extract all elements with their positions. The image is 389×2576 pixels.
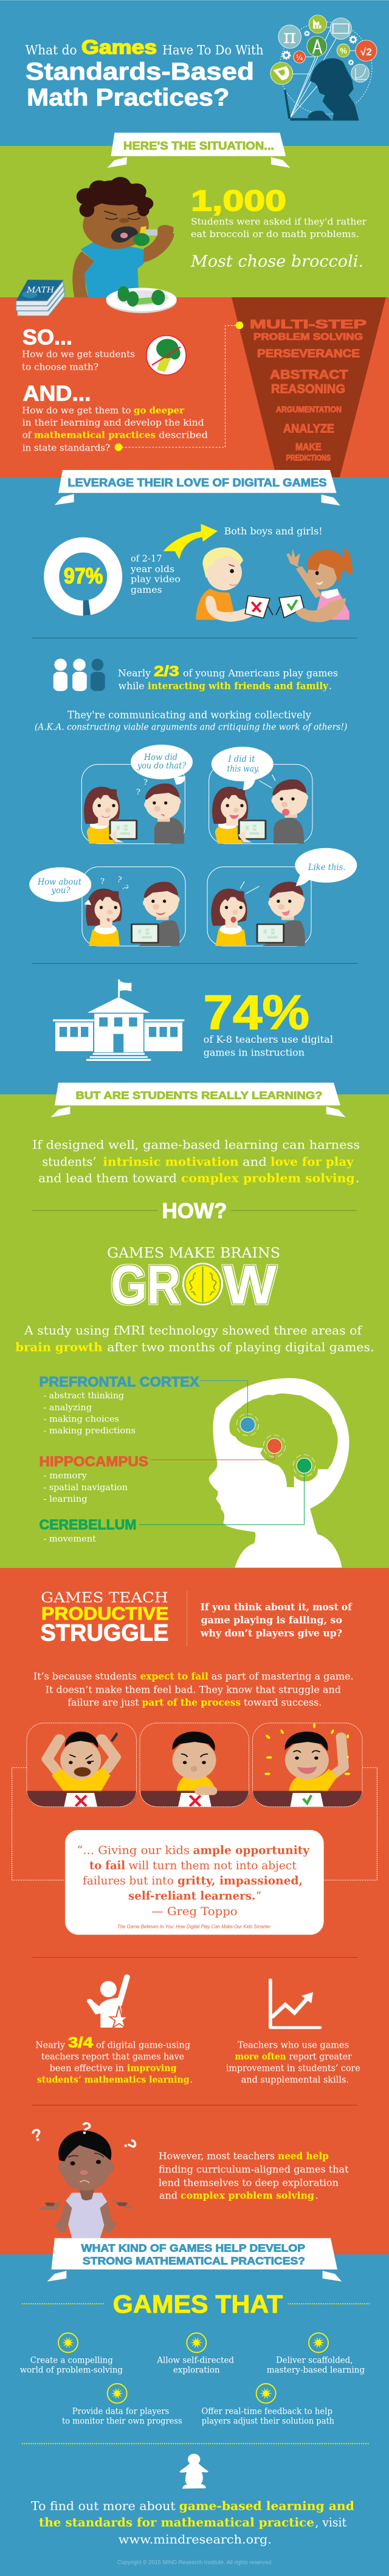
text: teachers who use games more often: and supplemental skills.	[241, 2074, 349, 2085]
label: hippocampus: - learning	[43, 1494, 88, 1504]
text block: so how do we get students to choose math: to choose math?	[22, 361, 98, 372]
illustration: confused teacher: ?	[29, 2125, 44, 2146]
text: communicating and working collectively	[35, 710, 347, 733]
banner: but are students really learning	[51, 1083, 346, 1117]
text: nearly 3/4 of teachers: students’ mathematics learning	[37, 2074, 190, 2085]
callout: Greg Toppo quote: ample opportunity	[193, 1843, 310, 1857]
text: if designed well	[32, 1138, 360, 1185]
icon: school building	[53, 979, 184, 1061]
text block: and how do we get them to go deeper: described	[159, 429, 208, 440]
text block: and how do we get them to go deeper: mathematical practices	[34, 429, 156, 440]
comic panel 1: you do that?	[137, 761, 187, 771]
label: cerebellum: - movement	[43, 1535, 96, 1544]
text: nearly 3/4 of teachers: Nearly	[35, 2039, 65, 2050]
text: teachers need help: lend themselves to deep exploration	[159, 2177, 339, 2188]
icon: student thinking with math symbols: %	[340, 46, 347, 55]
comic panel 1: ?	[136, 788, 140, 797]
feature: self-directed exploration: Allow self-directed	[156, 2356, 234, 2366]
text: if designed well: If designed well, game-based learning can harness	[32, 1138, 360, 1152]
text: nearly 3/4 of teachers: improving	[127, 2063, 177, 2074]
funnel of mathematical practices: PROBLEM SOLVING	[253, 332, 363, 342]
stat: 74 percent of teachers: of K-8 teachers use digital	[204, 1034, 333, 1045]
illustration: broccoli plate	[106, 286, 177, 313]
label: cerebellum	[39, 1517, 137, 1544]
text: if designed well: .	[356, 1171, 359, 1185]
text: nearly 2/3 of young Americans: .	[329, 680, 332, 691]
dotted connector	[115, 322, 243, 451]
callout: Greg Toppo quote: — Greg Toppo	[151, 1905, 238, 1918]
funnel of mathematical practices: ABSTRACT	[270, 368, 348, 382]
text: communicating and working collectively: They're communicating and working collectively	[67, 710, 311, 722]
comic panel 3	[29, 867, 185, 946]
text: of 2-17 year olds play video games: year olds	[130, 564, 174, 575]
callout: Greg Toppo quote: The Game Believes In You: How Digital Play Can Make Our Kids Smarter	[117, 1924, 271, 1930]
comic panel 2: this way.	[227, 764, 260, 774]
callout: Greg Toppo quote: “... Giving our kids	[77, 1843, 190, 1857]
text block: and how do we get them to go deeper: AND...	[23, 382, 91, 406]
text: of 2-17 year olds play video games	[130, 553, 181, 595]
feature: data for players: to monitor their own progress	[62, 2417, 182, 2426]
label: prefrontal cortex	[39, 1374, 199, 1435]
text: nearly 2/3 of young Americans: Nearly	[118, 668, 151, 679]
text: teachers who use games more often: improvement in students’ core	[226, 2063, 360, 2074]
label: prefrontal cortex: - analyzing	[43, 1403, 92, 1412]
comic panel 1	[81, 745, 193, 844]
callout: Greg Toppo quote: gritty, impassioned,	[177, 1874, 303, 1887]
banner: what kind of games: WHAT KIND OF GAMES HELP DEVELOP	[81, 2242, 305, 2254]
text: teachers who use games more often: more often	[235, 2051, 286, 2062]
text: students expect to fail: part of the process	[142, 1697, 241, 1708]
text: students expect to fail: expect to fail	[140, 1670, 208, 1682]
dotted divider	[22, 2443, 370, 2444]
text block: so how do we get students to choose math	[22, 326, 135, 372]
callout: Greg Toppo quote	[65, 1830, 324, 1935]
text: students expect to fail: It doesn’t make them feel bad. They know that struggle and	[46, 1683, 341, 1695]
heading: games make brains grow: GAMES MAKE BRAINS	[107, 1245, 280, 1261]
text: of 2-17 year olds play video games: games	[131, 584, 162, 595]
comic panel 4: Like this.	[308, 863, 346, 872]
text: nearly 2/3 of young Americans: 2/3	[154, 663, 179, 680]
heading: how: HOW?	[162, 1199, 227, 1223]
title: Have To Do With	[162, 43, 264, 57]
icon: person with star	[87, 1977, 128, 2028]
arrow: yellow curved arrow	[164, 524, 218, 559]
banner: here's the situation	[107, 133, 291, 168]
icon: rising line graph	[270, 1980, 320, 2028]
feature: scaffolded learning: mastery-based learning	[267, 2366, 365, 2375]
label: hippocampus: - spatial navigation	[43, 1483, 128, 1493]
copyright: Copyright © 2015 MIND Research Institute. All rights reserved.	[117, 2559, 273, 2565]
illustration: confused teacher: ?	[78, 2118, 94, 2139]
callout: Greg Toppo quote: will turn them not into abject	[128, 1859, 297, 1872]
comic panel 3: How about	[37, 877, 82, 887]
label: hippocampus: - memory	[43, 1471, 87, 1481]
heading: games teach productive struggle: STRUGGLE	[40, 1620, 169, 1646]
heading: games teach productive struggle	[40, 1590, 169, 1646]
section background: green learning	[0, 1094, 389, 1568]
label: prefrontal cortex: - making choices	[43, 1414, 119, 1424]
text: nearly 2/3 of young Americans: of young Americans play games	[183, 668, 338, 679]
comic panel 2: I did it	[228, 754, 255, 764]
text: if designed well: and lead them toward	[38, 1171, 177, 1185]
text: of 2-17 year olds play video games: of 2-17	[131, 553, 162, 564]
feature: real-time feedback: Offer real-time feedback to help	[201, 2407, 332, 2417]
icon: no broccoli	[146, 336, 186, 375]
section background: orange question	[0, 297, 389, 477]
callout: Greg Toppo quote: self-reliant learners.	[128, 1889, 255, 1902]
panel: determined student	[140, 1723, 249, 1807]
funnel of mathematical practices: MAKE	[295, 441, 322, 453]
label: hippocampus	[39, 1454, 148, 1504]
funnel of mathematical practices: PREDICTIONS	[286, 452, 331, 462]
text: teachers need help: need help	[278, 2150, 329, 2162]
panel: frustrated student	[27, 1723, 136, 1807]
title: Standards-Based	[26, 58, 254, 85]
text: nearly 3/4 of teachers: .	[190, 2074, 193, 2085]
title	[26, 36, 263, 111]
title: Games	[81, 36, 157, 58]
text: teachers need help: However, most teachers	[159, 2150, 275, 2162]
banner: leverage their love of digital games	[55, 470, 340, 506]
icon: student thinking with math symbols: π	[283, 25, 296, 48]
feature: data for players: Provide data for players	[72, 2407, 169, 2417]
icon: math books	[16, 280, 64, 316]
text: nearly 2/3 of young Americans: while	[119, 680, 145, 691]
illustration: confused teacher	[29, 2118, 141, 2239]
text: why don't players give up: If you think about it, most of	[201, 1601, 353, 1612]
text block: and how do we get them to go deeper: How do we get them to	[22, 405, 131, 416]
text block: and how do we get them to go deeper	[22, 382, 208, 454]
text: to find out more	[31, 2498, 354, 2546]
text: to find out more: , visit	[315, 2515, 346, 2530]
text: students expect to fail	[33, 1670, 354, 1708]
text: 1,000 students: Students were asked if they'd rather	[191, 216, 367, 227]
text: fMRI study	[15, 1323, 374, 1354]
text block: and how do we get them to go deeper: in their learning and develop the kind	[22, 417, 204, 428]
heading: games teach productive struggle: PRODUCTIVE	[41, 1604, 169, 1624]
section background: green situation	[0, 146, 389, 298]
chart: 97 percent ring	[52, 545, 115, 616]
comic panel 1: ?	[143, 778, 148, 787]
text: nearly 3/4 of teachers	[35, 2034, 193, 2085]
label: prefrontal cortex: PREFRONTAL CORTEX	[39, 1374, 199, 1390]
text: nearly 3/4 of teachers: teachers report that games have	[41, 2051, 184, 2062]
feature: self-directed exploration: exploration	[173, 2366, 220, 2375]
funnel of mathematical practices: ARGUMENTATION	[276, 404, 342, 414]
text: nearly 3/4 of teachers: 3/4	[68, 2034, 94, 2051]
callout: Greg Toppo quote: to fail	[89, 1859, 125, 1872]
text: teachers need help: and	[159, 2190, 177, 2201]
dotted frame behind quote	[12, 1767, 377, 1880]
illustration: head with brain regions	[139, 1378, 349, 1567]
comic panel 2	[209, 747, 312, 844]
label: hippocampus: HIPPOCAMPUS	[39, 1454, 148, 1469]
text: to find out more: www.mindresearch.org.	[119, 2532, 272, 2546]
text: to find out more: To find out more about	[31, 2498, 176, 2513]
text: why don't players give up: game playing is failing, so	[201, 1614, 342, 1626]
text: teachers need help: finding curriculum-aligned games that	[159, 2163, 349, 2175]
feature: compelling world	[20, 2333, 123, 2375]
stat: 74 percent of teachers	[204, 985, 333, 1058]
text: 1,000 students: Most chose broccoli.	[190, 252, 363, 271]
text block: and how do we get them to go deeper: in state standards?	[22, 443, 110, 454]
icon: student thinking with math symbols	[270, 15, 377, 120]
icon: brain as letter O	[182, 1263, 223, 1305]
text: if designed well: and	[243, 1155, 267, 1169]
text: teachers need help: complex problem solving	[181, 2190, 314, 2201]
section background: orange struggle	[0, 1568, 389, 2254]
label: prefrontal cortex: - abstract thinking	[43, 1391, 124, 1401]
feature: scaffolded learning	[267, 2333, 365, 2375]
text: if designed well: complex problem solving	[181, 1171, 355, 1185]
text: why don't players give up: why don’t players give up?	[200, 1628, 342, 1639]
text: teachers need help: .	[315, 2190, 318, 2201]
comic panel 1: How did	[143, 753, 177, 762]
banner: here's the situation: HERE'S THE SITUATION...	[123, 139, 274, 152]
stat: 74 percent of teachers: games in instruction	[204, 1047, 305, 1058]
section background: blue digital games	[0, 477, 389, 1095]
banner: what kind of games	[47, 2238, 342, 2282]
label: prefrontal cortex: - making predictions	[43, 1426, 136, 1435]
text: 1,000 students: 1,000	[191, 185, 286, 218]
text block: and how do we get them to go deeper: go deeper	[134, 405, 185, 416]
heading: games make brains grow	[107, 1245, 280, 1316]
feature: data for players	[62, 2384, 182, 2426]
icon: student thinking with math symbols: √2	[360, 46, 372, 58]
text: students expect to fail: as part of mastering a game.	[212, 1670, 354, 1682]
text: both boys and girls: Both boys and girls!	[224, 525, 323, 537]
text: if designed well: intrinsic motivation	[103, 1155, 239, 1169]
icon: penguin mascot	[180, 2454, 208, 2488]
feature: real-time feedback: players adjust their solution path	[202, 2417, 334, 2426]
divider	[32, 963, 357, 964]
panel: successful student	[253, 1723, 362, 1807]
text: teachers who use games more often: report greater	[289, 2051, 353, 2062]
comic panel 4	[207, 848, 357, 946]
funnel of mathematical practices: REASONING	[271, 382, 345, 396]
feature: compelling world: world of problem-solving	[20, 2366, 123, 2375]
title: What do	[26, 43, 77, 57]
heading: games make brains grow: GR	[111, 1255, 181, 1316]
section background: blue header	[0, 0, 389, 146]
text: communicating and working collectively: (A.K.A. constructing viable arguments and critiquing the work of others!)	[35, 723, 347, 733]
feature: compelling world: Create a compelling	[30, 2356, 113, 2366]
banner: what kind of games: STRONG MATHEMATICAL PRACTICES?	[83, 2254, 305, 2267]
stat: 74 percent of teachers: 74%	[204, 985, 309, 1039]
heading: games that: GAMES THAT	[113, 2290, 283, 2318]
section background: blue games that	[0, 2254, 389, 2576]
comic panel 3: ?	[116, 875, 123, 885]
text: nearly 3/4 of teachers: been effective in	[50, 2063, 124, 2074]
text: teachers who use games more often	[226, 2039, 360, 2085]
text: teachers need help	[159, 2150, 349, 2201]
funnel of mathematical practices: ANALYZE	[283, 423, 334, 436]
text block: so how do we get students to choose math: SO...	[22, 326, 72, 350]
callout: Greg Toppo quote: ”	[256, 1889, 261, 1902]
feature: self-directed exploration	[156, 2333, 234, 2375]
feature: real-time feedback	[201, 2384, 334, 2426]
comic panel 3: you?	[51, 886, 71, 896]
text: fMRI study: brain growth	[15, 1339, 103, 1354]
text: if designed well: students’	[42, 1155, 96, 1169]
banner: leverage their love of digital games: LEVERAGE THEIR LOVE OF DIGITAL GAMES	[67, 476, 327, 489]
funnel of mathematical practices: PERSEVERANCE	[257, 347, 360, 359]
book label: MATH	[26, 286, 55, 295]
heading: games teach productive struggle: GAMES TEACH	[41, 1590, 168, 1606]
text: 1,000 students	[190, 185, 367, 271]
comic panel 3: ?	[100, 877, 105, 886]
text: students expect to fail: toward success.	[244, 1697, 322, 1708]
funnel of mathematical practices: MULTI-STEP	[250, 318, 367, 331]
text: fMRI study: A study using fMRI technology showed three areas of	[24, 1323, 363, 1338]
text: if designed well: love for play	[270, 1155, 354, 1169]
icon: two of three people highlighted	[53, 658, 105, 691]
text block: so how do we get students to choose math: How do we get students	[22, 349, 135, 360]
divider	[32, 1957, 357, 1958]
text: students expect to fail: It’s because students	[33, 1670, 137, 1682]
illustration: boy eating broccoli	[72, 177, 174, 297]
text: students expect to fail: failure are just	[67, 1697, 139, 1708]
feature: scaffolded learning: Deliver scaffolded,	[276, 2356, 353, 2366]
text: why don't players give up	[200, 1601, 353, 1639]
text: 1,000 students: eat broccoli or do math problems.	[191, 229, 359, 240]
text: nearly 2/3 of young Americans: interacting with friends and family	[148, 680, 329, 691]
comic panel 3: ?	[120, 884, 130, 892]
title: Math Practices?	[27, 84, 230, 111]
label: cerebellum: CEREBELLUM	[39, 1517, 137, 1533]
text: nearly 3/4 of teachers: of digital game-using	[96, 2039, 190, 2050]
heading: games make brains grow: W	[223, 1255, 277, 1316]
text: to find out more: the standards for mathematical practice	[39, 2515, 314, 2530]
funnel of mathematical practices	[232, 297, 386, 477]
callout: Greg Toppo quote: failures but into	[83, 1874, 174, 1887]
illustration: boy and girl with tablets	[196, 547, 353, 622]
icon: student thinking with math symbols: ¼	[296, 54, 303, 62]
text: to find out more: game-based learning and	[179, 2498, 354, 2513]
text: fMRI study: after two months of playing digital games.	[107, 1339, 374, 1354]
illustration: confused teacher: ?	[120, 2136, 141, 2153]
text: teachers who use games more often: Teachers who use games	[238, 2039, 349, 2050]
text block: and how do we get them to go deeper: of	[22, 429, 32, 440]
text: nearly 2/3 of young Americans	[118, 663, 338, 691]
banner: but are students really learning: BUT ARE STUDENTS REALLY LEARNING?	[75, 1089, 322, 1101]
chart: 97 percent ring: 97%	[64, 563, 103, 588]
text: of 2-17 year olds play video games: play video	[131, 574, 181, 585]
